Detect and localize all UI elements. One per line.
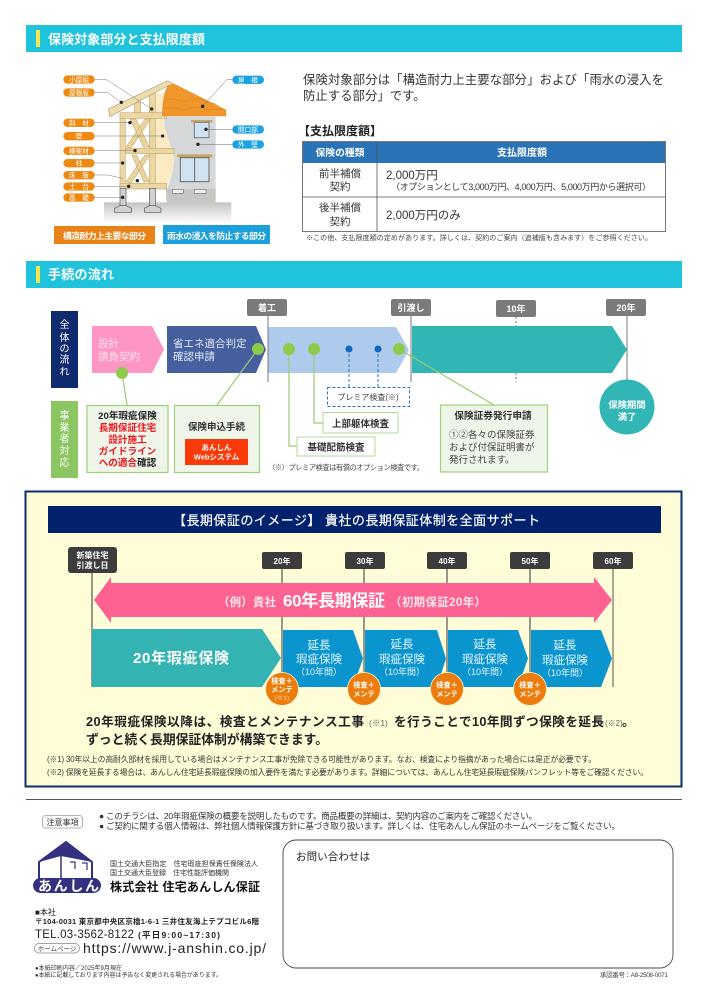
inspection badges: 検査＋ bbox=[353, 680, 375, 690]
company names: 国土交通大臣登録 住宅性能評価機関 bbox=[110, 868, 229, 877]
heading: coverage section bbox=[26, 25, 682, 52]
house cutaway diagram: 柱 bbox=[76, 159, 83, 168]
company address and contact: (平日9:00~17:30) bbox=[138, 930, 220, 940]
year tags: 50年 bbox=[522, 556, 538, 566]
notice tag: 注意事項 bbox=[46, 817, 78, 827]
year tags: 引渡し日 bbox=[76, 560, 108, 570]
summary statement: (※2) bbox=[605, 719, 623, 728]
house cutaway diagram: 基 礎 bbox=[69, 193, 89, 202]
footnotes: (※2) 保険を延長する場合は、あんしん住宅延長瑕疵保険の加入要件を満たす必要があります。詳細については、あんしん住宅延長瑕疵保険パンフレット等をご確認ください。 bbox=[47, 767, 648, 777]
arrow: extension 4: 延長 bbox=[554, 639, 577, 652]
year tags: 40年 bbox=[439, 556, 455, 566]
summary statement: (※1) bbox=[369, 718, 388, 728]
subheading: payment limit: 【支払限度額】 bbox=[298, 123, 382, 138]
notice text: ● ご契約に関する個人情報は、弊社個人情報保護方針に基づき取り扱います。詳しくは、住宅あんしん保証のホームページをご覧ください。 bbox=[99, 821, 620, 831]
table: payment limits: 2,000万円のみ bbox=[386, 209, 461, 222]
company logo: あんしん bbox=[38, 878, 99, 894]
table: payment limits: （オプションとして3,000万円、4,000万円、5,000万円から選択可） bbox=[391, 181, 651, 192]
company address and contact: ■本社 bbox=[35, 907, 56, 917]
company names: 国土交通大臣指定 住宅瑕疵担保責任保険法人 bbox=[110, 859, 258, 868]
house cutaway diagram: 外 壁 bbox=[238, 140, 258, 149]
arrow: extension 1: （10年間） bbox=[296, 666, 342, 677]
box: insurance application: Webシステム bbox=[194, 452, 240, 462]
arrow: extension 1: 延長 bbox=[308, 639, 331, 652]
box: warranty guideline check: ガイドライン bbox=[99, 446, 157, 458]
house cutaway diagram bbox=[63, 75, 264, 223]
row label: overall flow: 全 bbox=[60, 318, 70, 331]
print notes bbox=[35, 964, 222, 979]
arrow: extension 2: （10年間） bbox=[379, 666, 425, 677]
summary statement: 。 bbox=[622, 715, 635, 729]
row label: contractor actions: 応 bbox=[60, 457, 70, 469]
box: warranty guideline check: への適合確認 bbox=[99, 457, 157, 469]
table footnote: ※この他、支払限度額の定めがあります。詳しくは、契約のご案内（追補版も含みます）をご参照ください。 bbox=[306, 233, 652, 242]
company address and contact bbox=[34, 907, 266, 956]
arrow: energy conformity application: 省エネ適合判定 bbox=[173, 337, 247, 350]
arrow: 60-year warranty: （例）貴社 bbox=[218, 595, 276, 609]
company names: 株式会社 住宅あんしん保証 bbox=[110, 879, 260, 894]
arrow: energy conformity application: 確認申請 bbox=[173, 350, 215, 363]
timeline markers: 20年 bbox=[616, 302, 636, 313]
print notes: ●本紙印刷内容／2025年9月現在 bbox=[35, 964, 122, 972]
house cutaway diagram: 小屋組 bbox=[69, 75, 89, 84]
box: foundation inspection bbox=[297, 437, 375, 456]
premium inspection dashed box: プレミア検査(※) bbox=[337, 392, 399, 402]
connector lines bbox=[122, 349, 494, 446]
year tags: 20年 bbox=[274, 556, 290, 566]
timeline markers: 10年 bbox=[506, 303, 526, 314]
summary statement bbox=[86, 714, 635, 747]
premium inspection note: （※）プレミア検査は有償のオプション検査です。 bbox=[268, 463, 424, 472]
notice text bbox=[99, 811, 620, 831]
house cutaway diagram: 壁 bbox=[76, 132, 83, 141]
arrow: 20-year defect insurance: 20年瑕疵保険 bbox=[133, 649, 229, 667]
table: payment limits: 保険の種類 bbox=[316, 146, 365, 159]
timeline markers bbox=[247, 299, 646, 382]
summary statement: 20年瑕疵保険以降は、検査とメンテナンス工事 bbox=[86, 714, 364, 729]
company logo bbox=[33, 842, 101, 894]
timeline year lines bbox=[92, 569, 613, 687]
table: payment limits bbox=[302, 142, 666, 232]
arrow: insurance period bbox=[412, 326, 627, 373]
house cutaway diagram: 土 台 bbox=[69, 182, 89, 191]
arrow: extension 1 bbox=[283, 630, 363, 687]
house cutaway diagram: 屋根版 bbox=[69, 88, 89, 97]
panel: long-term warranty image bbox=[26, 492, 682, 786]
coverage description text: 防止する部分」です。 bbox=[303, 88, 426, 103]
approval number: 承認番号：A8-2508-0071 bbox=[600, 971, 668, 979]
arrow: extension 3: 延長 bbox=[474, 638, 497, 651]
box: warranty guideline check: 20年瑕疵保険 bbox=[98, 410, 157, 422]
notice tag bbox=[42, 816, 82, 828]
box: insurance application: 保険申込手続 bbox=[188, 421, 245, 433]
row label: contractor actions: 対 bbox=[60, 444, 70, 457]
table: payment limits: 契約 bbox=[330, 180, 350, 193]
summary statement: ずっと続く長期保証体制が構築できます。 bbox=[86, 732, 328, 747]
box: policy issuance: ①②各々の保険証券 bbox=[449, 429, 535, 441]
contact box: お問い合わせは bbox=[296, 850, 370, 863]
row label: contractor actions: 者 bbox=[60, 433, 70, 445]
panel title band bbox=[48, 506, 661, 533]
row label: overall flow: 体 bbox=[60, 332, 70, 344]
arrow: extension 3: （10年間） bbox=[462, 666, 508, 677]
premium inspection dashed box bbox=[328, 349, 410, 406]
row label: overall flow bbox=[51, 311, 78, 388]
house cutaway diagram: 横架材 bbox=[69, 146, 89, 155]
inspection badges: メンテ bbox=[519, 690, 541, 698]
row label: contractor actions bbox=[51, 401, 78, 478]
table: payment limits: 後半補償 bbox=[319, 201, 361, 214]
arrow: construction period bbox=[268, 327, 409, 373]
footnotes bbox=[47, 754, 648, 777]
row label: contractor actions: 業 bbox=[60, 421, 70, 434]
inspection badges: 検査＋ bbox=[436, 680, 458, 690]
company address and contact: ホームページ bbox=[38, 945, 77, 953]
timeline markers: 引渡し bbox=[397, 302, 425, 313]
table: payment limits: 前半補償 bbox=[319, 167, 361, 180]
house cutaway diagram: 床 版 bbox=[69, 171, 89, 180]
year tags: 30年 bbox=[357, 556, 373, 566]
inspection badges: 検査＋ bbox=[271, 676, 293, 686]
arrow: extension 4 bbox=[531, 630, 612, 687]
box: superstructure inspection: 上部躯体検査 bbox=[332, 418, 389, 430]
table: payment limits: 2,000万円 bbox=[386, 170, 438, 182]
summary statement: を行うことで10年間ずつ保険を延長 bbox=[394, 714, 604, 729]
arrow: extension 4: （10年間） bbox=[542, 667, 588, 678]
panel title band: 【長期保証のイメージ】 貴社の長期保証体制を全面サポート bbox=[173, 513, 540, 528]
arrow: extension 3: 瑕疵保険 bbox=[462, 652, 508, 666]
box: foundation inspection: 基礎配筋検査 bbox=[307, 442, 365, 454]
arrow: extension 1: 瑕疵保険 bbox=[296, 652, 342, 666]
row label: overall flow: の bbox=[60, 344, 70, 355]
box: warranty guideline check: 長期保証住宅 bbox=[99, 422, 157, 434]
notice text: ● このチラシは、20年瑕疵保険の概要を説明したものです。商品概要の詳細は、契約内容のご案内をご確認ください。 bbox=[99, 811, 537, 821]
company names bbox=[110, 859, 260, 894]
arrow: extension 4: 瑕疵保険 bbox=[542, 653, 588, 667]
legend: structural parts: 構造耐力上主要な部分 bbox=[63, 230, 146, 241]
arrow: design and contract bbox=[92, 326, 164, 373]
heading: procedure section: 手続の流れ bbox=[48, 267, 114, 282]
table: payment limits: 支払限度額 bbox=[497, 146, 547, 159]
arrow: energy conformity application bbox=[167, 326, 266, 373]
year tags: 60年 bbox=[605, 556, 621, 566]
box: policy issuance: 保険証券発行申請 bbox=[454, 409, 532, 422]
footnotes: (※1) 30年以上の高耐久部材を採用している場合はメンテナンス工事が免除できる可能性があります。なお、検査により指摘があった場合には是正が必要です。 bbox=[47, 754, 596, 764]
arrow: extension 2 bbox=[365, 630, 446, 687]
house cutaway diagram: 屋 根 bbox=[238, 75, 258, 84]
year tags bbox=[68, 547, 633, 573]
year tags: 新築住宅 bbox=[76, 550, 108, 560]
heading: procedure section bbox=[26, 261, 682, 288]
circle: insurance period ended: 満了 bbox=[618, 411, 636, 422]
circle: insurance period ended: 保険期間 bbox=[608, 399, 646, 410]
circle: insurance period ended bbox=[600, 380, 654, 434]
company address and contact: 〒104-0031 東京都中央区京橋1-6-1 三井住友海上テプコビル6階 bbox=[35, 916, 260, 926]
box: insurance application bbox=[174, 406, 260, 472]
legend: structural parts bbox=[54, 226, 155, 244]
arrow: 60-year warranty bbox=[94, 577, 612, 623]
house cutaway diagram: 開口部 bbox=[238, 126, 258, 134]
arrow: extension 3 bbox=[448, 630, 528, 687]
arrow: 60-year warranty: （初期保証20年） bbox=[390, 595, 486, 609]
arrow: extension 2: 延長 bbox=[390, 638, 414, 651]
box: policy issuance bbox=[440, 405, 548, 472]
house cutaway diagram: 斜 材 bbox=[69, 118, 89, 127]
company address and contact: TEL.03-3562-8122 bbox=[35, 929, 134, 941]
inspection badges: メンテ bbox=[271, 685, 293, 694]
inspection badges: 検査＋ bbox=[519, 680, 541, 690]
legend: rainwater parts: 雨水の浸入を防止する部分 bbox=[167, 230, 266, 241]
table: payment limits: 契約 bbox=[330, 215, 350, 228]
row label: overall flow: 流 bbox=[60, 354, 70, 366]
inspection badges: メンテ bbox=[353, 690, 375, 698]
company address and contact: https://www.j-anshin.co.jp/ bbox=[83, 940, 266, 956]
box: superstructure inspection bbox=[323, 412, 398, 433]
box: warranty guideline check bbox=[87, 406, 168, 472]
contact box bbox=[283, 840, 673, 968]
inspection badges: (※1) bbox=[275, 695, 289, 702]
inspection badges bbox=[266, 672, 546, 706]
arrow: 20-year defect insurance bbox=[92, 629, 281, 687]
notices bbox=[42, 811, 620, 831]
coverage description text: 保険対象部分は「構造耐力上主要な部分」および「雨水の浸入を bbox=[303, 73, 664, 87]
box: warranty guideline check: 設計施工 bbox=[108, 434, 147, 446]
inspection badges: メンテ bbox=[436, 690, 458, 698]
panel: procedure flow bbox=[26, 261, 682, 478]
arrow: extension 2: 瑕疵保険 bbox=[379, 652, 425, 666]
print notes: ●本紙に記載しております内容は予告なく変更される場合があります。 bbox=[35, 971, 222, 979]
box: policy issuance: 発行されます。 bbox=[449, 454, 515, 466]
arrow: 60-year warranty: 60年長期保証 bbox=[283, 590, 385, 610]
legend: rainwater parts bbox=[163, 225, 270, 244]
box: policy issuance: および付保証明書が bbox=[449, 442, 535, 454]
heading: coverage section: 保険対象部分と支払限度額 bbox=[48, 32, 205, 47]
coverage description text bbox=[303, 73, 664, 103]
panel: coverage and payment limit bbox=[26, 25, 682, 244]
flow dots bbox=[116, 343, 405, 379]
row label: overall flow: れ bbox=[60, 366, 70, 378]
box: insurance application: あんしん bbox=[202, 443, 232, 452]
arrow: design and contract: 請負契約 bbox=[98, 350, 140, 363]
timeline markers: 着工 bbox=[258, 302, 276, 313]
arrow: design and contract: 設計 bbox=[98, 338, 119, 350]
row label: contractor actions: 事 bbox=[60, 409, 70, 422]
